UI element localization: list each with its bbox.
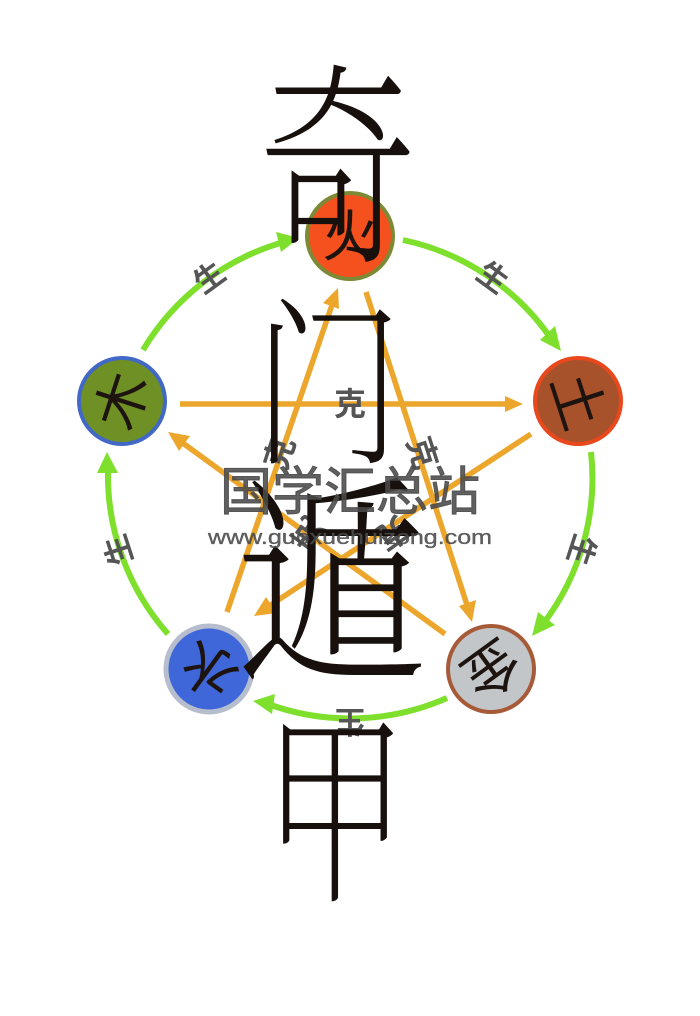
arrow: metal to wood bbox=[168, 432, 445, 634]
watermark: www.guoxuehuizong.com bbox=[207, 526, 492, 549]
circle: fire bbox=[307, 193, 393, 279]
arrow: earth to water bbox=[254, 434, 531, 616]
label: sheng (generate) on cycle: 生 bbox=[99, 530, 140, 569]
arrow: wood to earth bbox=[180, 396, 523, 412]
arrow: fire to metal bbox=[366, 292, 476, 622]
calligraphic title bbox=[237, 52, 427, 931]
label: sheng (generate) on cycle bbox=[99, 256, 601, 737]
circle: metal: 金 bbox=[450, 627, 532, 711]
arrow: wood to fire bbox=[143, 232, 299, 350]
calligraphic title: 门 bbox=[253, 289, 403, 489]
arrow: earth to metal bbox=[532, 452, 592, 636]
circle: fire: 火 bbox=[322, 205, 378, 268]
watermark bbox=[207, 464, 492, 549]
label: ke (control) on star: 克 bbox=[368, 509, 416, 557]
calligraphic title: 奇 bbox=[259, 52, 417, 294]
circle: water: 水 bbox=[168, 627, 250, 711]
label: sheng (generate) on cycle: 生 bbox=[470, 256, 514, 300]
green generating cycle arrows bbox=[97, 232, 592, 718]
arrow: metal to water bbox=[253, 694, 447, 718]
label: sheng (generate) on cycle: 生 bbox=[560, 530, 601, 569]
label: ke (control) on star: 克 bbox=[284, 509, 332, 557]
arrow: water to fire bbox=[227, 288, 339, 612]
label: ke (control) on star: 克 bbox=[400, 432, 444, 474]
label: ke (control) on star: 克 bbox=[258, 432, 302, 474]
label: sheng (generate) on cycle: 生 bbox=[188, 256, 232, 300]
circle: wood: 木 bbox=[84, 365, 161, 438]
label: ke (control) on star bbox=[258, 386, 444, 557]
arrow: water to wood bbox=[97, 452, 168, 634]
calligraphic title: 遁 bbox=[237, 464, 427, 713]
label: sheng (generate) on cycle: 生 bbox=[335, 704, 365, 737]
watermark: 国学汇总站 bbox=[220, 464, 480, 522]
calligraphic title: 甲 bbox=[263, 702, 407, 931]
orange controlling star arrows bbox=[168, 288, 531, 634]
circle: earth: 土 bbox=[539, 365, 616, 438]
arrow: fire to earth bbox=[403, 240, 561, 351]
label: ke (control) on star: 克 bbox=[334, 386, 366, 422]
